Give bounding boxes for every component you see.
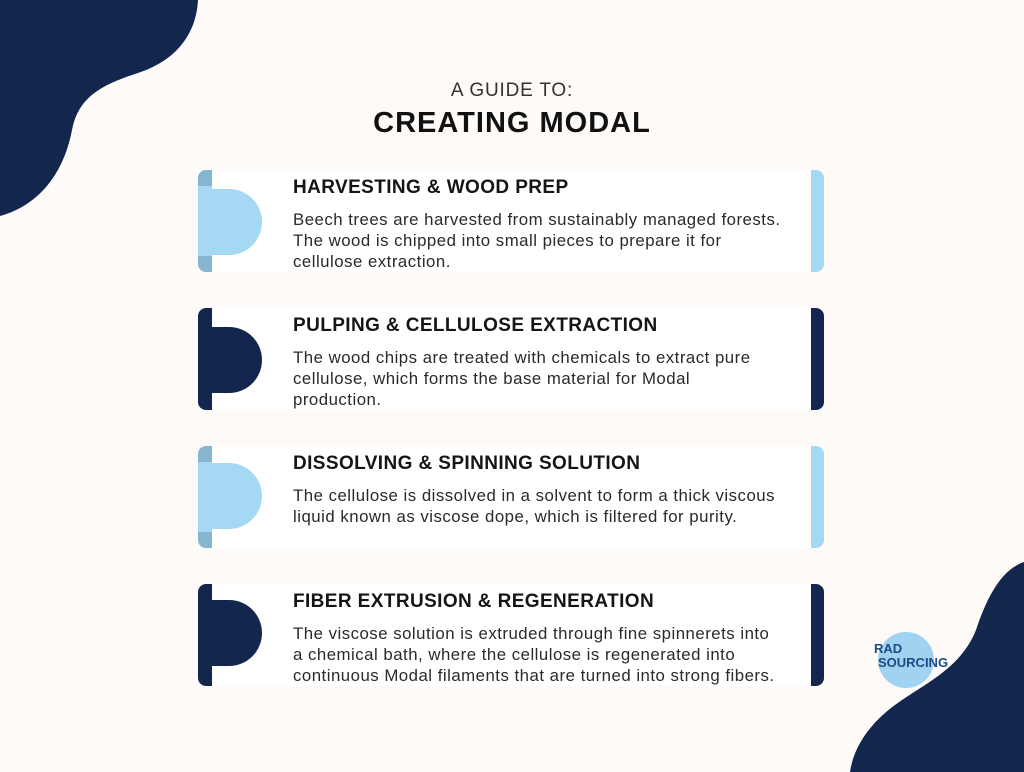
text: The cellulose is dissolved in a solvent to form a thick viscous (293, 486, 775, 505)
text: production. (293, 390, 382, 409)
text: The wood chips are treated with chemicals to extract pure (293, 348, 751, 367)
text (293, 624, 775, 685)
heading: DISSOLVING & SPINNING SOLUTION (293, 453, 640, 474)
text (293, 486, 775, 526)
text: cellulose extraction. (293, 252, 451, 271)
text: The viscose solution is extruded through fine spinnerets into (293, 624, 769, 643)
panel: extrusion (198, 584, 824, 686)
heading: PULPING & CELLULOSE EXTRACTION (293, 315, 658, 336)
text: Beech trees are harvested from sustainably managed forests. (293, 210, 780, 229)
text: continuous Modal filaments that are turned into strong fibers. (293, 666, 775, 685)
logo: RAD (874, 641, 902, 656)
text: liquid known as viscose dope, which is filtered for purity. (293, 507, 737, 526)
text: cellulose, which forms the base material for Modal (293, 369, 690, 388)
decorative blob: bottom-right (850, 562, 1024, 772)
logo: SOURCING (878, 655, 948, 670)
text (293, 348, 751, 409)
text: The wood is chipped into small pieces to prepare it for (293, 231, 722, 250)
panel: pulping (198, 308, 824, 410)
heading: FIBER EXTRUSION & REGENERATION (293, 591, 654, 612)
panel: harvesting (198, 170, 824, 272)
panel: dissolving (198, 446, 824, 548)
subtitle: A GUIDE TO: (451, 80, 573, 101)
title: CREATING MODAL (373, 107, 651, 139)
text (293, 210, 780, 271)
heading: HARVESTING & WOOD PREP (293, 177, 569, 198)
decorative blob: top-left (0, 0, 198, 216)
logo (874, 632, 948, 688)
text: a chemical bath, where the cellulose is regenerated into (293, 645, 735, 664)
